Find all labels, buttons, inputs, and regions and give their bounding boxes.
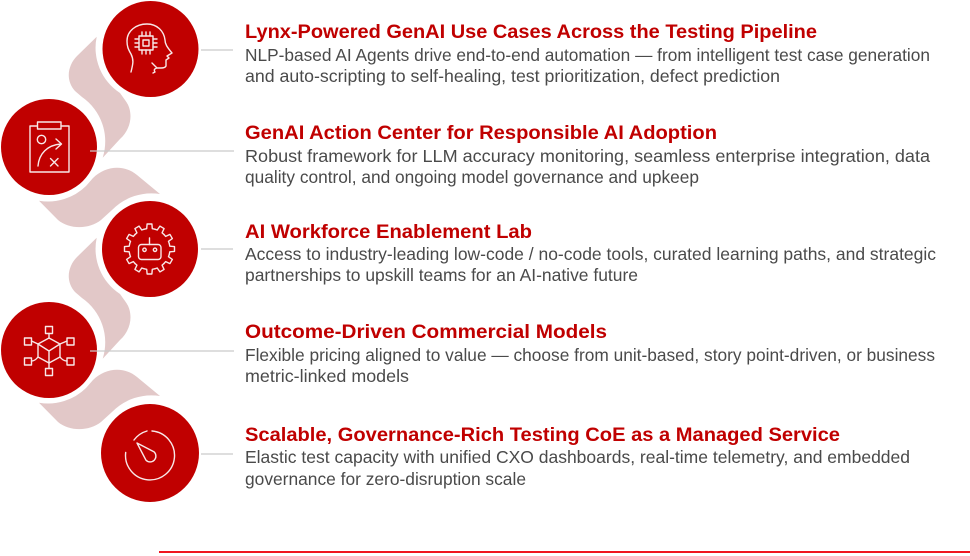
text block 3: partnerships to upskill teams for an AI-native future [245,265,638,285]
text block 4: Flexible pricing aligned to value — choose from unit-based, story point-driven, or business [245,345,935,365]
text block 1 [245,21,930,86]
ribbon connectors between circles [39,37,160,429]
text block 4: metric-linked models [245,366,409,386]
text block 3 [245,221,936,285]
item 4: connected cube icon badge [1,302,234,398]
text block 4 [245,321,935,386]
text block 3: Access to industry-leading low-code / no-code tools, curated learning paths, and strategic [245,244,936,264]
text block 3: AI Workforce Enablement Lab [245,221,532,243]
text block 5 [245,424,910,489]
text block 1: NLP-based AI Agents drive end-to-end automation — from intelligent test case generation [245,45,930,65]
text block 2: Robust framework for LLM accuracy monitoring, seamless enterprise integration, data [245,146,930,166]
text block 2: quality control, and ongoing model governance and upkeep [245,167,699,187]
text block 5: Scalable, Governance-Rich Testing CoE as a Managed Service [245,424,840,446]
text block 2 [245,122,930,187]
item 2: strategy clipboard icon badge [1,99,234,195]
text block 1: Lynx-Powered GenAI Use Cases Across the Testing Pipeline [245,21,817,43]
text block 5: governance for zero-disruption scale [245,469,526,489]
bottom red rule [159,551,970,553]
item 5: gauge icon badge [101,404,233,502]
text block 1: and auto-scripting to self-healing, test prioritization, defect prediction [245,66,780,86]
text block 2: GenAI Action Center for Responsible AI Adoption [245,122,717,144]
text block 5: Elastic test capacity with unified CXO dashboards, real-time telemetry, and embedded [245,447,910,467]
item 3: robot gear icon badge [102,201,233,297]
text block 4: Outcome-Driven Commercial Models [245,321,607,343]
item 1: AI head icon badge [102,1,233,97]
